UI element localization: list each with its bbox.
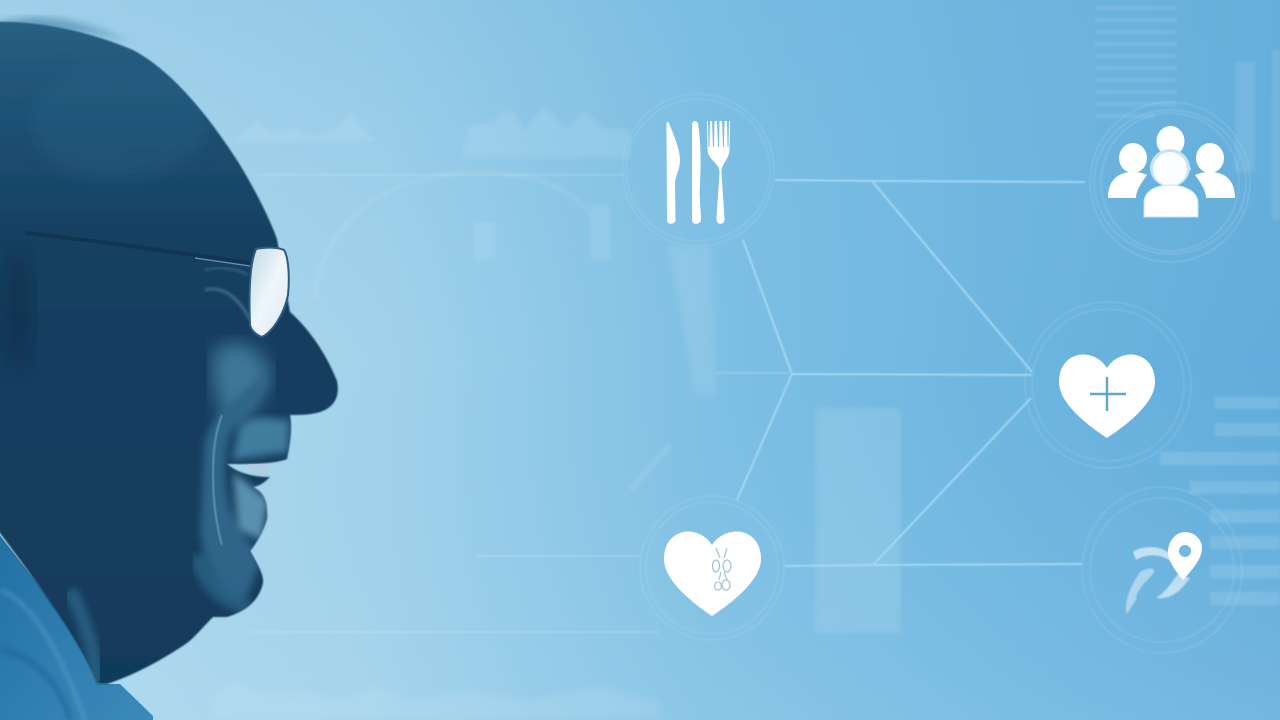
connector lines [737, 180, 1085, 566]
head silhouette [0, 22, 338, 684]
faint background bars at lower right [1160, 397, 1280, 605]
faint background charts and data [210, 105, 901, 720]
glasses temple arm [25, 233, 250, 263]
shirt [0, 520, 153, 720]
teeth [248, 464, 270, 476]
icon: group of people in ring [1090, 102, 1250, 262]
man in profile wearing glasses [0, 18, 338, 720]
icon: heart with plus in ring [1025, 302, 1191, 468]
faint background table at top right [1095, 6, 1280, 220]
icon: knife, knife and fork in ring [622, 94, 774, 246]
glasses lens [250, 248, 289, 337]
icon: heart with anatomical heart in ring [640, 496, 784, 640]
icon: map pin with road in ring [1082, 487, 1242, 653]
face shading [2, 60, 290, 684]
wispy hair [0, 18, 135, 44]
